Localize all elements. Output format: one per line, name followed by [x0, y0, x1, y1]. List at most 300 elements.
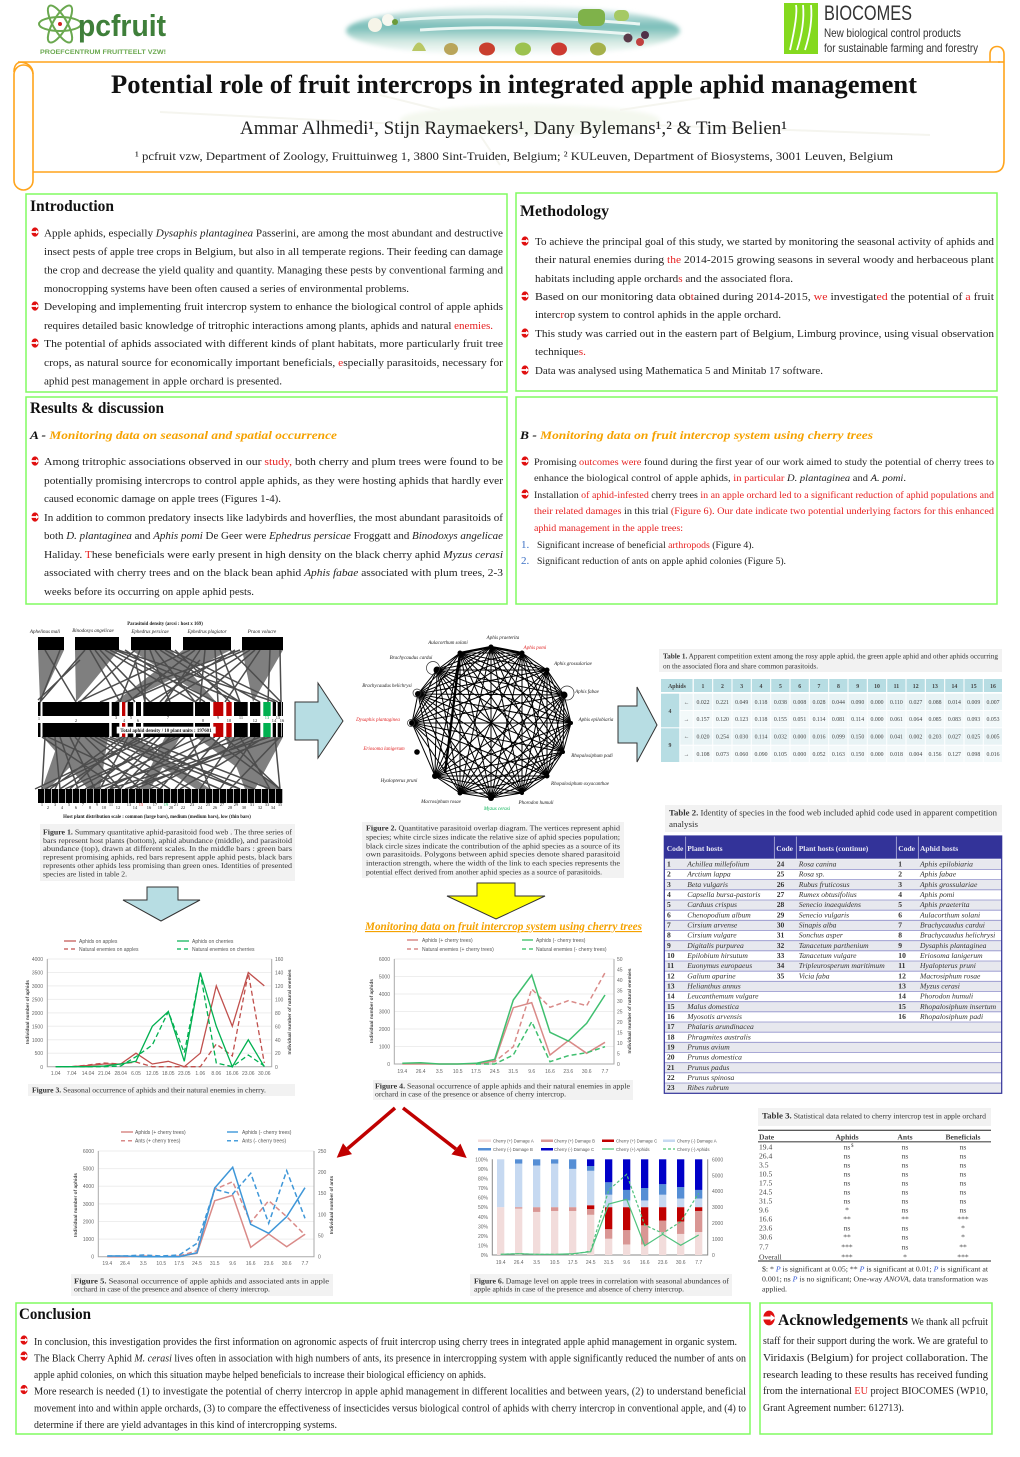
logo: BIOCOMES: New biological control products — [824, 26, 961, 40]
plant code numbers: 27 — [220, 802, 225, 807]
text: conclusion body: apple aphid colonies, on which this situation maybe helped beneficials to increase their biological efficiency on aphids. — [34, 1370, 486, 1381]
table 3 data: ns — [844, 1170, 850, 1178]
figure 6 axes: 60% — [478, 1196, 489, 1202]
table 3 data: 31.5 — [759, 1196, 772, 1206]
figure 4 axes: 10 — [617, 1041, 623, 1047]
table 2 grid: Cirsium arvense — [687, 920, 738, 930]
figure 3 axes: 500 — [35, 1051, 43, 1057]
subheading: A: A - Monitoring data on seasonal and spatial occurrence — [29, 430, 337, 442]
arrow: figure 1 to figure 2 — [295, 683, 343, 758]
table 2 grid: Rosa sp. — [798, 870, 825, 879]
text: introduction body: Apple aphids, especially Dysaphis plantaginea Passerini, are among the most abundant and destructive — [44, 228, 503, 240]
table 2 grid: 8 — [667, 931, 671, 940]
table 3 data: Aphids — [835, 1132, 859, 1142]
plant code numbers: 17 — [153, 802, 158, 807]
table 3 data: ** — [843, 1232, 851, 1242]
figure 5 axes: 3000 — [83, 1202, 94, 1208]
figure 1 caption — [40, 824, 295, 881]
figure 6 axes: 24.5 — [586, 1260, 596, 1266]
figure 3 axes: 16.06 — [226, 1071, 239, 1077]
arrow: figure 2 to table 1 — [618, 687, 657, 762]
figure 4 legend: Aphids (+ cherry trees) — [422, 938, 473, 944]
figure 6: stacked bar and line chart — [475, 1139, 723, 1266]
table 2 grid: 1 — [898, 860, 902, 868]
table 1 grid: 0.007 — [986, 700, 1000, 706]
text: results A body: caused economic damage on apple trees (Figures 1-4). — [44, 494, 281, 505]
table 3 caption — [758, 1108, 991, 1126]
figure 6 axes: 1000 — [712, 1237, 723, 1243]
figure 6 legend — [478, 1139, 717, 1152]
species labels: Rhopalosiphum padi — [570, 754, 613, 759]
table 3 data: 3.5 — [759, 1160, 769, 1170]
table 2 grid: 15 — [898, 1002, 906, 1011]
logo: pcfruit: pcfruit — [78, 8, 166, 43]
figure 5 axes: 7.7 — [302, 1261, 309, 1267]
figure 3 axes: 23.06 — [242, 1071, 255, 1077]
table 2 grid: Aphid hosts — [920, 844, 958, 853]
table 3 data: ns — [960, 1142, 966, 1152]
figure 5 axes: 200 — [318, 1170, 327, 1176]
figure 4 axes — [369, 957, 633, 1075]
plant code numbers: 23 — [190, 802, 195, 807]
panel: results B — [516, 397, 997, 604]
text: methodology body: To achieve the principal goal of this study, we started by monitoring the seasonal activity of aphids and — [535, 237, 995, 248]
table 2 grid: 7 — [898, 920, 902, 930]
heading: conclusion: Conclusion — [19, 1306, 91, 1323]
figure 5 axes: 3.5 — [140, 1261, 147, 1267]
figure 5 axes: 26.4 — [120, 1261, 130, 1267]
table 1 grid: 0.156 — [928, 752, 942, 758]
table 1 grid: 14 — [952, 684, 957, 690]
text: methodology body: Based on our monitoring data ob tained during 2014-2015, we investigat ed the potential of a fruit — [535, 292, 994, 303]
table 1 grid: 4 — [760, 684, 763, 690]
table 1 grid: 15 — [971, 684, 977, 690]
figure 5 axes: 5000 — [83, 1167, 94, 1173]
text: introduction body: aphid pest management in apple orchard is presented. — [44, 376, 282, 388]
table 3 data: ns — [902, 1178, 908, 1188]
text: results B body: Significant increase of beneficial arthropods (Figure 4). — [537, 540, 754, 551]
table 2 grid: 11 — [898, 961, 906, 970]
aphid code numbers: 3 — [115, 715, 118, 720]
figure 5 axes: 24.5 — [192, 1261, 202, 1267]
table 2 grid: Achillea millefolium — [686, 860, 750, 868]
figure 4 axes: 30 — [617, 999, 623, 1005]
figure 5 axes: 150 — [318, 1191, 327, 1197]
table 1 grid: 0.163 — [832, 752, 845, 758]
figure 3 axes: 4000 — [32, 957, 43, 963]
table 3 data: *** — [841, 1242, 853, 1252]
text: methodology body: habitats including apple orchard s and the associated flora. — [535, 274, 793, 285]
table 3 data: ns — [844, 1196, 850, 1206]
table 1 grid: 3 — [740, 684, 743, 690]
table 3 data: $ — [851, 1144, 854, 1149]
text: introduction body: The potential of aphids associated with different kinds of plant habitats, more particularly fruit tree — [44, 339, 503, 350]
table 2 grid: Aphis praeterita — [919, 900, 970, 909]
table 2 grid: Helianthus annus — [686, 982, 741, 990]
table 2 grid: Chenopodium album — [687, 910, 751, 919]
table 3 data: 9.6 — [759, 1206, 769, 1214]
figure 5 axes: 250 — [318, 1149, 327, 1155]
logo: BIOCOMES: for sustainable farming and forestry — [824, 41, 978, 55]
table 2 grid: 16 — [667, 1012, 675, 1021]
text: results B body: enhance the biological control of apple aphids, in particular D. plantaginea and A. pomi. — [534, 473, 906, 484]
aphid code numbers: 12 — [253, 718, 257, 723]
figure 4 axes: 30.6 — [582, 1069, 592, 1075]
table 2 grid: 8 — [898, 931, 902, 940]
plant code numbers: 5 — [68, 802, 71, 807]
table 2 grid: 14 — [667, 992, 675, 1001]
figure 4 caption — [373, 1080, 633, 1100]
figure 6 axes: 40% — [478, 1215, 489, 1221]
table 2 grid: 3 — [667, 880, 671, 889]
figure 1 caption: abundance (top), drawn at different scales. In the middle bars : green bars — [43, 844, 292, 853]
table 3 data: ns — [844, 1178, 850, 1188]
table 3 data: Overall — [759, 1252, 782, 1262]
table 2 grid: 32 — [777, 941, 784, 950]
figure 4 axes: 24.5 — [490, 1069, 500, 1075]
figure 5 axes: 100 — [318, 1212, 327, 1218]
text: results B body: Installation of aphid-infested cherry trees in an apple orchard led to a significant reduction of aphid populations and — [534, 490, 994, 501]
table 2 grid: 7 — [667, 920, 671, 930]
table 2 grid: Capsella bursa-pastoris — [687, 890, 761, 899]
table 3 data: 30.6 — [759, 1232, 772, 1242]
table 3 data: 23.6 — [759, 1224, 772, 1232]
table 3 data: ns — [960, 1178, 966, 1188]
figure 3 axes — [25, 957, 293, 1077]
text: results A body: Haliday. These beneficials were early present in high density on the black cherry aphid Myzus cerasi — [44, 550, 503, 561]
text: acknowledgements body: Viridaxis (Belgium) for project collaboration. The — [763, 1353, 988, 1364]
table 1 grid: 0.028 — [812, 700, 826, 706]
aphid code numbers: 5 — [130, 715, 133, 720]
table 3 data: ns — [902, 1188, 908, 1196]
figure 5 axes: 0 — [318, 1255, 321, 1261]
table 1 grid: 0.009 — [967, 700, 980, 706]
arrow: down from figure 1 — [123, 887, 200, 921]
figure 3 axes: 12.05 — [146, 1071, 159, 1077]
aphid bars top row — [38, 637, 283, 650]
table 3 data: ns — [902, 1160, 908, 1170]
plant code numbers: 10 — [102, 805, 107, 810]
figure 5: line chart — [73, 1130, 335, 1267]
text: results B body: their related damages in this trial (Figure 6). Our date indicate two potential underlying factors for this enhanced — [534, 506, 994, 517]
table 2 grid: Digitalis purpurea — [686, 941, 744, 950]
table 1 grid: 0.098 — [967, 752, 980, 758]
plant code numbers: 34 — [271, 805, 276, 810]
table 2 grid: Rhopalosiphum padi — [919, 1012, 983, 1021]
figure 4 axes: 9.6 — [528, 1069, 535, 1075]
table 1 grid: 0.018 — [890, 752, 903, 758]
figure 5 axes: 4000 — [83, 1184, 94, 1190]
species labels: Brachycaudus cardui — [390, 656, 433, 661]
figure 6 axes: 4000 — [712, 1189, 723, 1195]
text: results B body: Significant reduction of ants on apple aphid colonies (Figure 5). — [537, 556, 786, 567]
table 3 data: Beneficials — [945, 1132, 981, 1142]
table 1 grid: 0.254 — [716, 734, 729, 740]
table 3 data: 24.5 — [759, 1188, 772, 1196]
table 3 data: 19.4 — [759, 1142, 772, 1152]
table 1 grid: 0.157 — [696, 717, 710, 723]
table 2 grid: Tripleurosperum maritimum — [799, 961, 885, 970]
table 1 grid: 0.030 — [735, 734, 748, 740]
table 2 grid: Malus domestica — [686, 1002, 739, 1011]
table 2 grid: Myosotis arvensis — [686, 1012, 742, 1021]
plant code numbers: 4 — [61, 805, 64, 810]
figure 6 axes: 9.6 — [623, 1260, 630, 1266]
species labels: Aphis fabae — [574, 690, 600, 695]
logo: BIOCOMES: BIOCOMES — [824, 2, 912, 25]
text: results B body: 2. — [521, 555, 530, 567]
figure 5 axes: 31.5 — [210, 1261, 220, 1267]
figure 3 axes: 1500 — [32, 1024, 43, 1030]
table 2 grid: 25 — [777, 870, 784, 879]
figure 4 caption: Figure 4. Seasonal occurrence of apple aphids and their natural enemies in apple — [375, 1082, 631, 1090]
figure 6 axes: 10.5 — [550, 1260, 560, 1266]
table 1 grid: ← — [684, 734, 689, 740]
text: results A body: weeks before its occurring on apple aphid pests. — [44, 587, 254, 598]
figure 3 axes: 1000 — [32, 1038, 43, 1044]
table 2 grid: 35 — [777, 971, 784, 980]
link lines — [35, 650, 282, 789]
table 3 data: ns — [902, 1242, 908, 1252]
table 2 grid: 16 — [898, 1012, 906, 1021]
figure 4 legend: Natural enemies (+ cherry trees) — [422, 947, 494, 953]
table 1 grid: 0.052 — [812, 752, 826, 758]
parasitoid labels: Ephedrus plagiator — [186, 630, 227, 635]
parasitoid labels: Binodoxys angelicae — [72, 629, 115, 634]
figure 6 legend: Cherry (-) Aphids — [677, 1147, 709, 1152]
table 1 grid: 0.203 — [928, 734, 942, 740]
table 2 grid: 28 — [777, 900, 784, 909]
table 3 notes: $: * P is significant at 0.05; ** P is significant at 0.01; P is significant at — [762, 1264, 989, 1274]
figure 5 series — [107, 1167, 305, 1257]
table 2 grid: Rubus fruticosus — [798, 880, 850, 889]
logo: BIOCOMES — [784, 2, 978, 55]
table 2 grid: 29 — [777, 910, 784, 919]
table 3 data: ns — [960, 1170, 966, 1178]
table 2 grid: Eriosoma lanigerum — [919, 951, 983, 960]
table 1 grid: 0.022 — [696, 700, 710, 706]
text: results A body: Among tritrophic associations observed in our study, both cherry and plum trees were found to be — [44, 457, 503, 468]
species labels: Aphis grossulariae — [553, 662, 593, 667]
table 2 grid — [664, 836, 1002, 1093]
figure 4 axes: 3.5 — [436, 1069, 443, 1075]
table 1 grid: 0.090 — [851, 700, 864, 706]
plant code numbers: 20 — [169, 805, 174, 810]
table 2 grid: Rhopalosiphum insertum — [919, 1002, 997, 1011]
arrow: red to figure 6 — [403, 1108, 467, 1158]
table 2 grid: 20 — [667, 1053, 675, 1062]
table 1 grid: 11 — [894, 684, 899, 690]
aphid code numbers: 16 — [280, 718, 285, 723]
table 1 grid: 0.088 — [928, 700, 942, 706]
table 2 grid: Galium aparine — [687, 971, 736, 980]
figure 4 axes: 40 — [617, 978, 623, 984]
text: introduction body — [31, 227, 504, 388]
table 1 grid: Aphids — [668, 684, 687, 690]
table 2 caption: analysis — [669, 819, 699, 829]
figure 3 caption — [28, 1084, 295, 1096]
table 3 data: ** — [843, 1214, 851, 1224]
figure 5 axes: 17.5 — [174, 1261, 184, 1267]
table 2 grid: Macrosiphum rosae — [919, 971, 981, 980]
figure 2 caption: Figure 2. Quantitative parasitoid overlap diagram. The vertices represent aphid — [366, 824, 620, 832]
table 2 grid: Ribes rubrum — [686, 1083, 729, 1092]
table 1 grid: 0.114 — [851, 717, 864, 723]
table 3 data: 7.7 — [759, 1242, 769, 1252]
table 1 grid: 0.150 — [851, 734, 864, 740]
figure 3 axes: 1.06 — [195, 1071, 205, 1077]
table 2 grid: Senecio vulgaris — [799, 910, 849, 919]
table 2 grid: Phorodon humuli — [919, 992, 973, 1001]
icon: acknowledgement bullet — [763, 1311, 775, 1325]
heading: results and discussion: Results & discussion — [30, 400, 164, 417]
figure 6 axes: 3.5 — [533, 1260, 540, 1266]
figure 5 legend: Ants (- cherry trees) — [242, 1139, 287, 1145]
table 2 grid: 9 — [898, 941, 902, 950]
figure 2 caption: interaction strength, where the width of the link to each species represents the — [366, 858, 621, 868]
plant code numbers: 14 — [133, 805, 138, 810]
text: methodology body: techniques. — [535, 347, 586, 358]
figure 4 axes: 45 — [617, 968, 623, 974]
figure 4: line chart — [369, 938, 633, 1075]
table 2 grid: Sonchus asper — [799, 931, 843, 940]
species labels: Rhopalosiphum oxyacanthae — [550, 782, 610, 787]
figure 4 series — [402, 973, 605, 1064]
text: acknowledgements body: Grant Agreement number: 612713). — [763, 1403, 904, 1414]
figure 3 axes: Individual number of natural enemies — [287, 969, 293, 1055]
table 2 grid: 1 — [667, 860, 671, 868]
figure 3 legend: Aphids on apples — [79, 939, 118, 945]
table 3 data: ns — [902, 1224, 908, 1232]
figure 3 axes: 3500 — [32, 970, 43, 976]
table 2 grid: Arctium lappa — [686, 870, 731, 879]
table 2 grid: Code — [898, 844, 916, 853]
species labels: Aphis praeterita — [486, 636, 520, 641]
table 3 data: Ants — [897, 1132, 913, 1142]
table 1 grid: 0.127 — [948, 752, 961, 758]
figure 6 axes: 26.4 — [514, 1260, 524, 1266]
figure 3 legend: Aphids on cherries — [192, 939, 234, 945]
table 2 grid: Brachycaudus cardui — [920, 920, 985, 930]
table 2 grid: Phalaris arundinacea — [686, 1022, 754, 1031]
figure 4 axes: 20 — [617, 1020, 623, 1026]
aphid code numbers: 14 — [272, 718, 277, 723]
table 2 grid: Phragmites australis — [686, 1032, 751, 1041]
panel: methodology — [516, 193, 997, 391]
table 1 grid: 0.014 — [948, 700, 961, 706]
table 3 data: ns — [902, 1232, 908, 1242]
figure 4 axes: 0 — [617, 1062, 620, 1068]
figure 2 caption: potential effect derived from another aphid species as a source of parasitoids. — [366, 868, 602, 876]
table 1 grid: 0.083 — [948, 717, 961, 723]
table 3 data: * — [961, 1232, 965, 1242]
title banner scroll — [14, 46, 1004, 190]
text: introduction body: monocropping systems have been often caused a series of environmental problems. — [44, 284, 409, 295]
image: fruit banner — [346, 6, 680, 56]
plant code numbers: 26 — [213, 805, 218, 810]
table 2 grid: 19 — [667, 1042, 675, 1052]
parasitoid labels: Aphelinus mali — [29, 630, 61, 635]
table 2 grid: Leucanthemum vulgare — [686, 992, 759, 1001]
table 1 grid: 1 — [702, 684, 705, 690]
figure 5 axes: 0 — [91, 1255, 94, 1261]
figure 3 axes: 2000 — [32, 1011, 43, 1017]
figure 3 legend — [64, 939, 255, 953]
heading: introduction: Introduction — [30, 198, 114, 215]
table 1 grid: 0.118 — [755, 717, 768, 723]
table 2 grid: Brachycaudus helichrysi — [920, 931, 995, 940]
species labels: Macrosiphum rosae — [420, 800, 462, 805]
table 2 grid: Carduus crispus — [687, 900, 737, 909]
figure 6 axes: 80% — [478, 1176, 489, 1182]
aphid code numbers: 10 — [227, 718, 232, 723]
table 3 notes — [762, 1264, 989, 1294]
table 1 grid: 0.221 — [716, 700, 729, 706]
table 1 grid: 0.000 — [870, 717, 884, 723]
figure 6 axes — [475, 1157, 723, 1266]
figure 6 aphid lines — [501, 1174, 699, 1254]
figure 4 axes: 0 — [387, 1062, 390, 1068]
text: methodology body: Data was analysed using Mathematica 5 and Minitab 17 software. — [535, 366, 823, 377]
total density label: Total aphid density / 10 plant units : 197601 — [120, 729, 212, 734]
figure 4 axes: 23.6 — [563, 1069, 573, 1075]
figure 5 axes: 19.4 — [102, 1261, 112, 1267]
figure 3 axes: 18.05 — [162, 1071, 175, 1077]
table 2 grid: 18 — [667, 1032, 675, 1041]
figure 4 axes: 5 — [617, 1052, 620, 1058]
table 3 data: Date — [759, 1132, 775, 1142]
text: conclusion body: The Black Cherry Aphid M. cerasi lives often in association with high numbers of ants, its presence in intercropping system with apple significantly reduced the number of ants on — [34, 1354, 747, 1364]
plant code numbers: 28 — [228, 805, 233, 810]
table 1 grid: 0.008 — [793, 700, 806, 706]
table 3 caption: Table 3. Statistical data related to cherry intercrop test in apple orchard — [762, 1110, 986, 1120]
table 1 grid: 0.150 — [851, 752, 864, 758]
plant code numbers: 8 — [89, 805, 92, 810]
table 2 grid: Hyalopterus pruni — [919, 961, 976, 970]
plant code numbers: 15 — [139, 802, 144, 807]
figure 2 caption: own parasitoids. Polygons between aphid species denote shared parasitoid — [366, 850, 620, 858]
table 1 grid: → — [684, 752, 689, 758]
table 3 header rule — [758, 1141, 991, 1143]
aphid code numbers: 6 — [137, 718, 140, 723]
plant code numbers: 29 — [234, 802, 239, 807]
figure 5 axes: 10.5 — [156, 1261, 166, 1267]
text: acknowledgements body: from the international EU project BIOCOMES (WP10, — [763, 1386, 988, 1397]
figure 3 axes: 120 — [275, 984, 284, 990]
table 1 grid: 0.099 — [832, 734, 845, 740]
figure 4 axes: 7.7 — [602, 1069, 609, 1075]
table 3 data: ** — [959, 1242, 967, 1252]
table 1 caption: on the associated flora and share common parasitoids. — [663, 662, 818, 670]
figure 5 legend: Ants (+ cherry trees) — [135, 1139, 181, 1145]
table 2 grid: 26 — [777, 880, 784, 889]
figure 1 caption: species are listed in table 2. — [43, 870, 127, 878]
figure 5 axes — [73, 1149, 335, 1267]
figure 3: line chart — [25, 939, 293, 1077]
text: methodology body: This study was carried out in the eastern part of Belgium, Limburg province, using visual observation — [535, 329, 995, 340]
table 1 grid: 8 — [837, 684, 840, 690]
text: results B body: aphid management in the apple trees: — [534, 523, 683, 534]
text: conclusion body: In conclusion, this investigation provides the first information on agronomic aspects of fruit intercrop using cherry trees in integrated apple aphid management in organic system. — [34, 1337, 737, 1348]
figure 4 legend — [407, 938, 607, 953]
logo: pcfruit: PROEFCENTRUM FRUITTEELT VZW! — [40, 50, 166, 56]
table 3 data: 26.4 — [759, 1152, 772, 1160]
table 3 data: ns — [902, 1196, 908, 1206]
aphid code numbers: 13 — [265, 715, 270, 720]
table 1 grid: 0.027 — [909, 700, 922, 706]
figure 4 axes: Individual number of natural enemies — [627, 968, 633, 1054]
panel: conclusion — [16, 1303, 750, 1434]
